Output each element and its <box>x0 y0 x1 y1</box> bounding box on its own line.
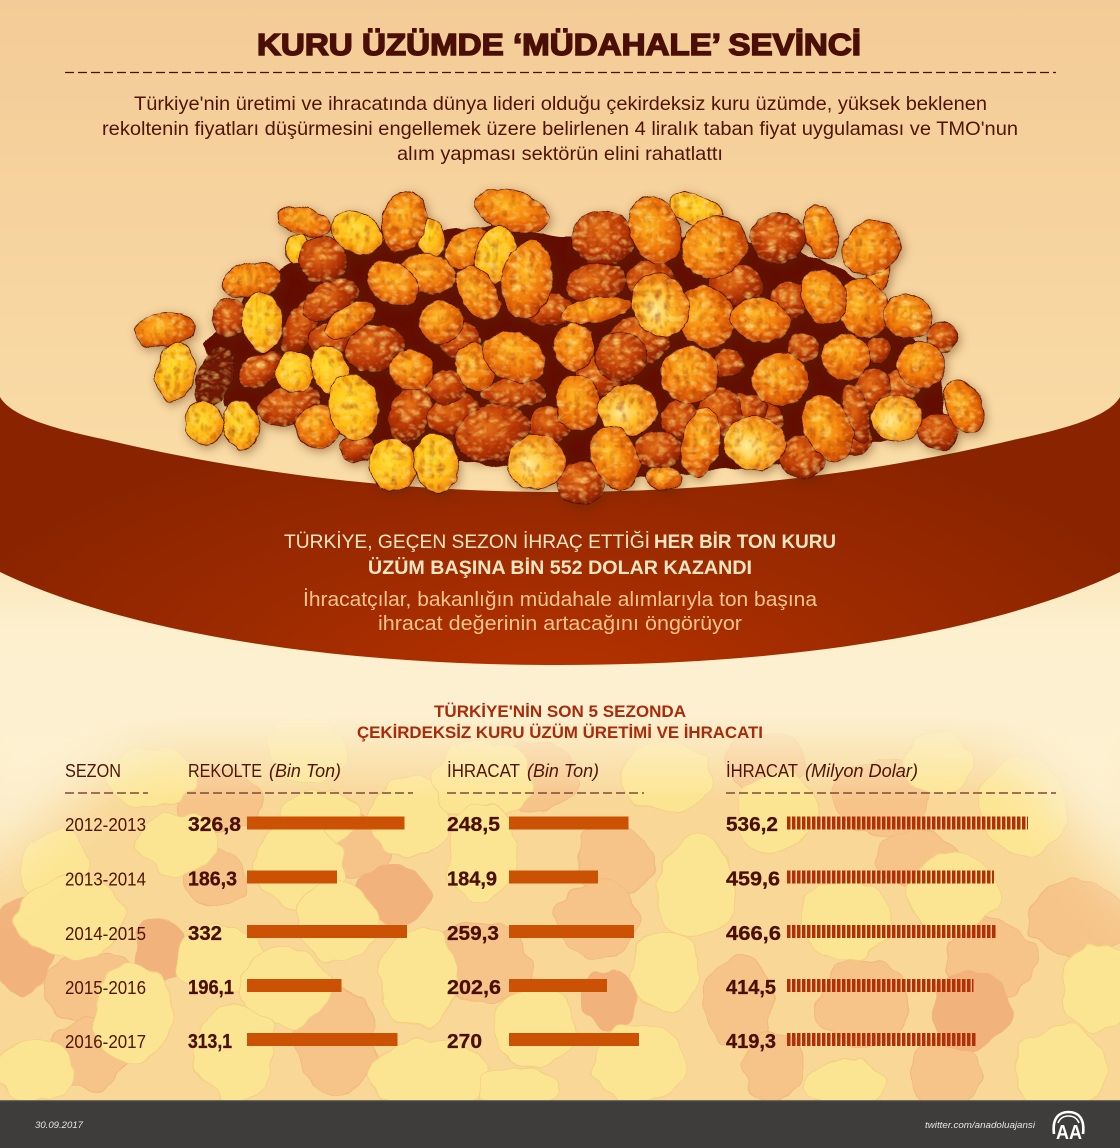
intro text block: rekoltenin fiyatları düşürmesini engellemek üzere belirlenen 4 liralık taban fiyat uygulaması ve TMO'nun <box>102 118 1018 140</box>
twitter handle: twitter.com/anadoluajansi <box>925 1120 1036 1131</box>
values: 186,3 <box>188 868 237 890</box>
band headline: HER BİR TON KURU <box>654 530 836 553</box>
values: 202,6 <box>447 977 501 999</box>
values: 419,3 <box>726 1031 776 1053</box>
band headline: ÜZÜM BAŞINA BİN 552 DOLAR KAZANDI <box>368 556 752 579</box>
season labels: 2014-2015 <box>65 924 146 944</box>
column headers: (Bin Ton) <box>269 761 341 781</box>
band subtext: ihracat değerinin artacağını öngörüyor <box>378 612 742 635</box>
values: 332 <box>188 923 222 945</box>
values: 326,8 <box>188 814 241 836</box>
logo: Anadolu Agency: AA <box>1056 1122 1082 1144</box>
rekolte bars <box>247 816 407 1046</box>
title: KURU ÜZÜMDE ‘MÜDAHALE’ SEVİNCİ <box>257 27 861 62</box>
export tonnage bars <box>509 816 639 1046</box>
values: 313,1 <box>188 1031 232 1053</box>
table heading: ÇEKİRDEKSİZ KURU ÜZÜM ÜRETİMİ VE İHRACATI <box>357 723 763 742</box>
footer bar <box>0 1100 1120 1148</box>
column headers: REKOLTE <box>188 761 262 781</box>
season labels: 2015-2016 <box>65 978 146 998</box>
export value striped bars <box>787 816 1028 1046</box>
band headline <box>284 530 836 579</box>
intro text block: Türkiye'nin üretimi ve ihracatında dünya lideri olduğu çekirdeksiz kuru üzümde, yüksek beklenen <box>134 93 987 115</box>
column headers <box>65 761 918 781</box>
values: 184,9 <box>447 868 497 890</box>
values: 196,1 <box>188 977 234 999</box>
table <box>65 761 1056 1053</box>
raisin pile illustration <box>132 182 992 504</box>
season labels: 2016-2017 <box>65 1032 146 1052</box>
intro text block <box>102 93 1018 165</box>
intro text block: alım yapması sektörün elini rahatlattı <box>397 143 723 165</box>
brown curved band <box>0 397 1120 665</box>
title divider <box>65 72 1056 74</box>
column headers: (Bin Ton) <box>527 761 599 781</box>
values: 466,6 <box>726 923 781 945</box>
faded raisin background <box>0 724 1120 1100</box>
values: 414,5 <box>726 977 776 999</box>
values: 259,3 <box>447 923 499 945</box>
column headers: SEZON <box>65 761 121 781</box>
band headline: TÜRKİYE, GEÇEN SEZON İHRAÇ ETTİĞİ <box>284 530 650 553</box>
season labels: 2012-2013 <box>65 815 146 835</box>
values: 248,5 <box>447 814 500 836</box>
values: 270 <box>447 1031 482 1053</box>
values <box>188 814 781 1053</box>
date: 30.09.2017 <box>35 1120 84 1131</box>
column headers: İHRACAT <box>447 761 520 781</box>
column headers: (Milyon Dolar) <box>805 761 918 781</box>
table heading: TÜRKİYE'NİN SON 5 SEZONDA <box>434 702 686 721</box>
column headers: İHRACAT <box>726 761 798 781</box>
values: 536,2 <box>726 814 778 836</box>
logo: Anadolu Agency <box>1054 1112 1083 1144</box>
table heading <box>357 702 763 742</box>
season labels <box>65 815 146 1052</box>
season labels: 2013-2014 <box>65 870 146 890</box>
values: 459,6 <box>726 868 780 890</box>
band subtext: İhracatçılar, bakanlığın müdahale alımlarıyla ton başına <box>303 588 818 611</box>
band subtext <box>303 588 818 635</box>
